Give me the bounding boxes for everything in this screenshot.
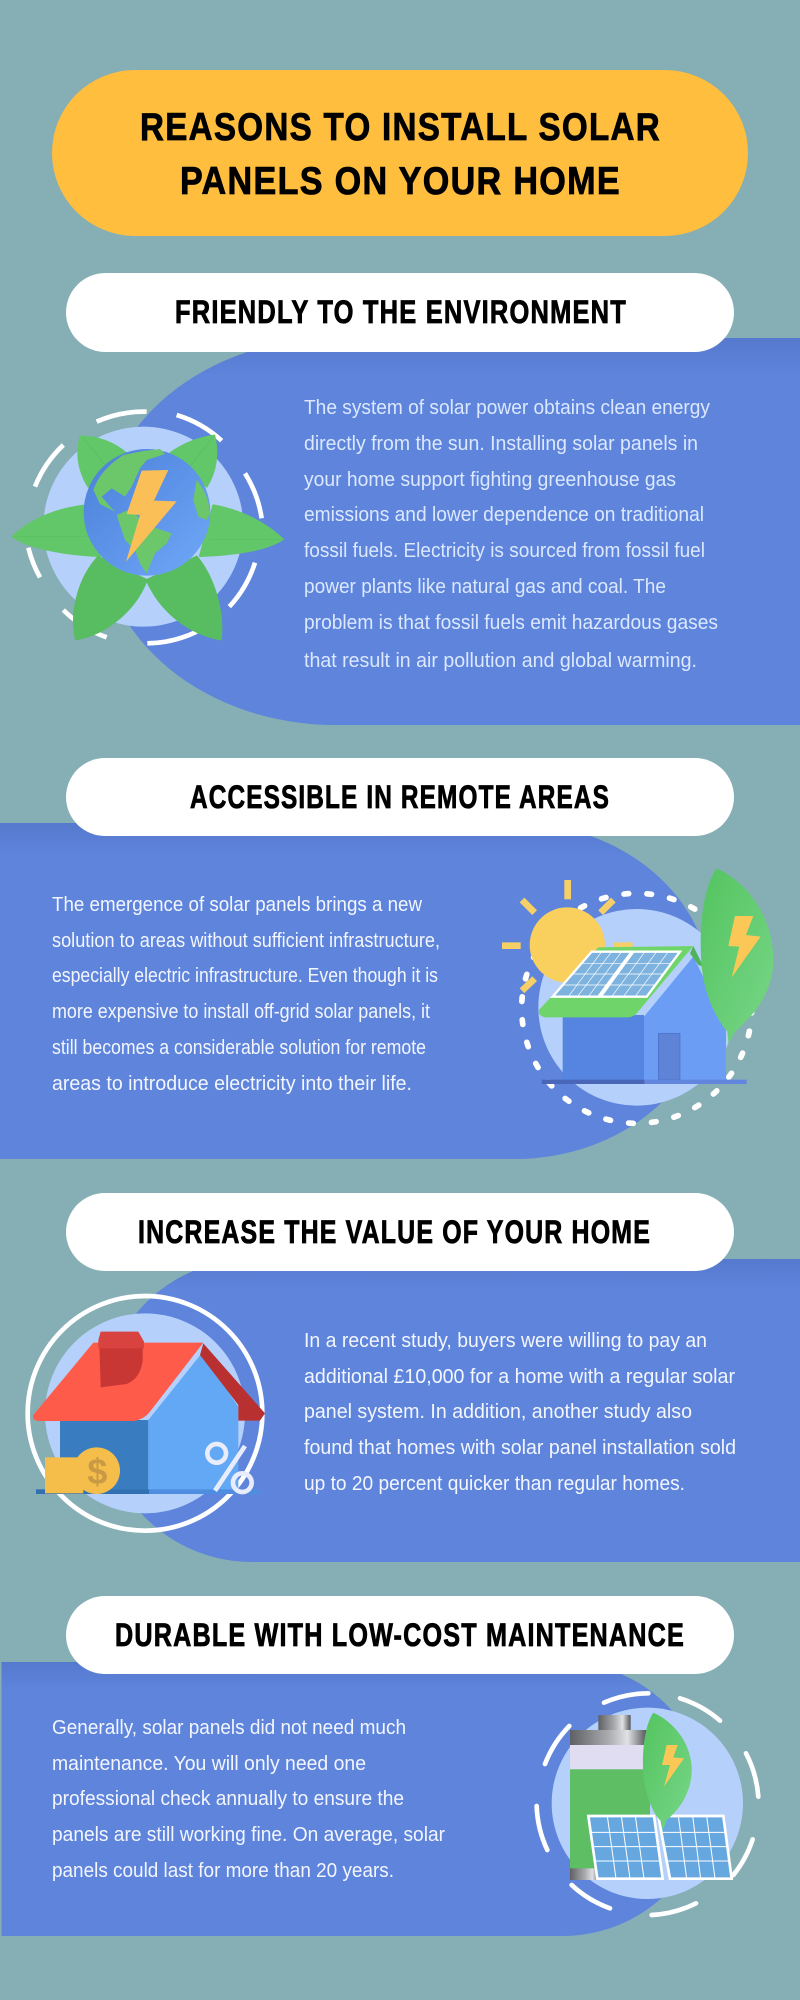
text block: remote areas: solution to areas without sufficient infrastructure, [52,929,440,952]
text block: home value: found that homes with solar panel installation sold [304,1436,736,1459]
text block: environment: fossil fuels. Electricity is sourced from fossil fuel [304,539,705,562]
title [52,70,748,236]
text block: environment: emissions and lower dependence on traditional [304,503,704,526]
icon: solar house with sun and leaf [502,868,773,1123]
icon: globe with leaves and lightning [13,412,283,643]
text block: home value: panel system. In addition, another study also [304,1400,692,1423]
text block: maintenance [52,1716,445,1882]
panel: home value background [101,1259,800,1562]
text block: maintenance: panels are still working fine. On average, solar [52,1823,445,1846]
text block: maintenance: Generally, solar panels did not need much [52,1716,406,1739]
text block: home value [304,1329,736,1495]
heading: durable with low-cost maintenance [66,1596,734,1674]
title: REASONS TO INSTALL SOLAR [140,106,661,149]
text block: environment: The system of solar power obtains clean energy [304,396,711,419]
heading: accessible in remote areas: ACCESSIBLE IN REMOTE AREAS [190,779,610,815]
text block: environment: directly from the sun. Installing solar panels in [304,432,698,455]
text block: environment [304,396,718,672]
text block: environment: problem is that fossil fuels emit hazardous gases [304,611,718,634]
text block: home value: In a recent study, buyers were willing to pay an [304,1329,707,1352]
text block: maintenance: panels could last for more than 20 years. [52,1859,394,1882]
title: PANELS ON YOUR HOME [180,160,621,203]
panel: environment background [100,338,800,725]
heading: friendly to the environment: FRIENDLY TO THE ENVIRONMENT [175,294,627,330]
icon: battery with leaf and solar panels [537,1693,758,1915]
text block: maintenance: professional check annually to ensure the [52,1787,404,1810]
panel: remote areas background [0,823,711,1159]
heading: accessible in remote areas [66,758,734,836]
text block: home value: up to 20 percent quicker than regular homes. [304,1472,685,1495]
text block: environment: your home support fighting greenhouse gas [304,468,676,491]
text block: remote areas: areas to introduce electricity into their life. [52,1072,412,1095]
panel: maintenance background [2,1662,706,1936]
icon: house with coins and percent: $ [87,1451,107,1492]
text block: remote areas: The emergence of solar panels brings a new [52,893,422,916]
heading: friendly to the environment [66,273,734,352]
text block: environment: power plants like natural gas and coal. The [304,575,666,598]
heading: increase the value of your home: INCREASE THE VALUE OF YOUR HOME [138,1214,651,1250]
icon: house with coins and percent [28,1296,265,1531]
text block: remote areas: still becomes a considerable solution for remote [52,1036,426,1059]
text block: home value: additional £10,000 for a home with a regular solar [304,1365,735,1388]
text block: remote areas: more expensive to install off-grid solar panels, it [52,1000,430,1023]
text block: remote areas: especially electric infrastructure. Even though it is [52,964,438,987]
text block: maintenance: maintenance. You will only need one [52,1752,366,1775]
text block: remote areas [52,893,440,1095]
text block: environment: that result in air pollution and global warming. [304,649,697,672]
heading: increase the value of your home [66,1193,734,1271]
